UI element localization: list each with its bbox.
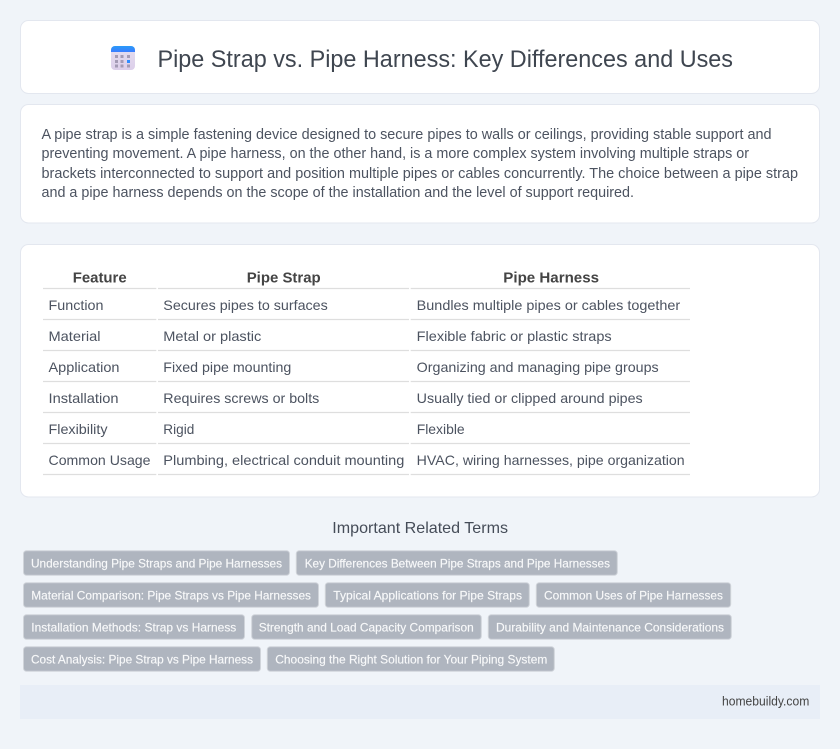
- footer source text: homebuildy.com: [722, 694, 809, 709]
- tag: understanding: Understanding Pipe Straps and Pipe Harnesses: [31, 556, 282, 570]
- row: installation: Requires screws or bolts: [163, 390, 319, 406]
- row: common usage: Common Usage: [48, 452, 151, 468]
- tag: cost analysis: Cost Analysis: Pipe Strap vs Pipe Harness: [31, 652, 253, 666]
- intro paragraph: A pipe strap is a simple fastening device designed to secure pipes to walls or ceilings, providing stable support and: [42, 127, 772, 143]
- tag: common uses: [536, 583, 731, 607]
- panel: intro text: [20, 104, 820, 223]
- icon: calendar: [111, 46, 135, 70]
- row: flexibility: Flexible: [417, 421, 465, 437]
- row: flexibility: Rigid: [163, 421, 194, 437]
- row: installation: Usually tied or clipped around pipes: [417, 390, 643, 406]
- panel: title header: [20, 20, 820, 94]
- tag: installation methods: [24, 615, 244, 639]
- tag: material comparison: [24, 583, 318, 607]
- row: common usage: HVAC, wiring harnesses, pipe organization: [417, 452, 685, 468]
- tag: material comparison: Material Comparison: Pipe Straps vs Pipe Harnesses: [31, 588, 311, 602]
- tag: strength and load: [252, 615, 481, 639]
- table header row: Pipe Strap: [247, 270, 321, 287]
- table header row: Feature: [73, 270, 127, 287]
- row: material: Metal or plastic: [163, 328, 261, 344]
- row: application: Organizing and managing pipe groups: [417, 359, 659, 375]
- intro paragraph: and a pipe harness depends on the scope of the installation and the level of support required.: [42, 185, 634, 201]
- row: flexibility: Flexibility: [48, 421, 108, 437]
- section heading: important related terms: Important Related Terms: [332, 520, 508, 537]
- row: common usage: [43, 452, 690, 474]
- tag: choosing the right solution: Choosing the Right Solution for Your Piping System: [275, 652, 547, 666]
- panel: comparison table: [20, 244, 820, 497]
- tag: typical applications: [325, 583, 529, 607]
- tag: durability: [488, 615, 731, 639]
- row: application: [43, 359, 690, 382]
- intro paragraph: [42, 127, 798, 201]
- table header row: Pipe Harness: [503, 270, 599, 287]
- title: Pipe Strap vs. Pipe Harness: Key Differences and Uses: [158, 46, 733, 73]
- intro paragraph: preventing movement. A pipe harness, on the other hand, is a more complex system involving multiple straps or: [42, 146, 749, 162]
- row: application: Application: [48, 359, 120, 375]
- row: function: Secures pipes to surfaces: [163, 297, 328, 313]
- panel: related term tags: [24, 551, 731, 671]
- intro paragraph: brackets interconnected to support and position multiple pipes or cables concurrently. The choice between a pipe strap: [42, 166, 798, 182]
- row: material: Material: [48, 328, 100, 344]
- row: common usage: Plumbing, electrical conduit mounting: [163, 452, 404, 468]
- tag: understanding: [24, 551, 290, 575]
- tag: strength and load: Strength and Load Capacity Comparison: [259, 620, 474, 634]
- row: function: Function: [48, 297, 104, 313]
- row: application: Fixed pipe mounting: [163, 359, 291, 375]
- tag: choosing the right solution: [267, 647, 554, 671]
- tag: common uses: Common Uses of Pipe Harnesses: [544, 588, 723, 602]
- tag: typical applications: Typical Applications for Pipe Straps: [333, 588, 522, 602]
- row: material: [43, 328, 690, 350]
- footer bar: [20, 685, 820, 719]
- row: function: [43, 297, 690, 320]
- row: installation: Installation: [48, 390, 118, 406]
- row: function: Bundles multiple pipes or cables together: [417, 297, 681, 313]
- tag: key differences: [296, 551, 617, 575]
- tag: durability: Durability and Maintenance Considerations: [496, 620, 724, 634]
- tag: key differences: Key Differences Between Pipe Straps and Pipe Harnesses: [305, 556, 610, 570]
- table header row: [43, 270, 690, 288]
- tag: installation methods: Installation Methods: Strap vs Harness: [31, 620, 236, 634]
- tag: cost analysis: [24, 647, 260, 671]
- row: material: Flexible fabric or plastic straps: [417, 328, 612, 344]
- row: flexibility: [43, 421, 690, 444]
- row: installation: [43, 390, 690, 412]
